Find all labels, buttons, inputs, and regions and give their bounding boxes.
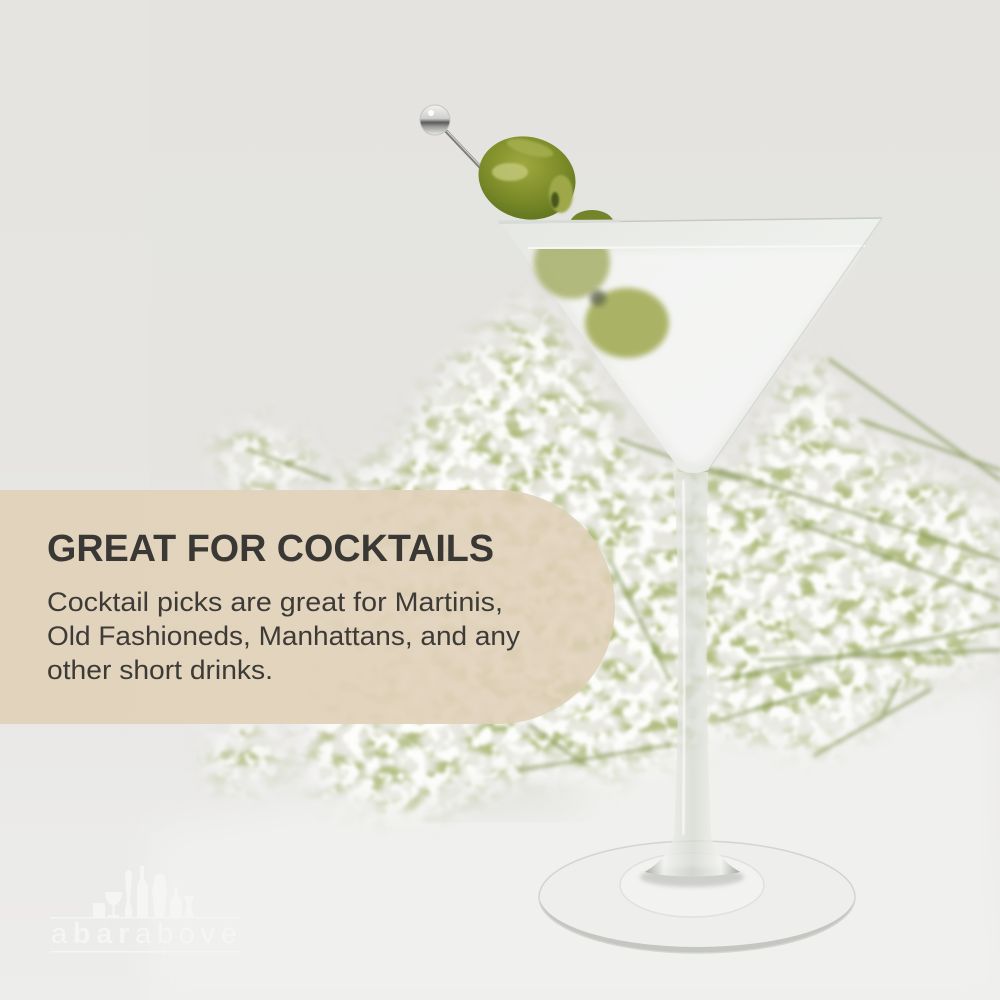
submerged olives xyxy=(530,249,673,362)
flower stems xyxy=(250,360,1000,770)
body text: Cocktail picks are great for Martinis, xyxy=(47,587,503,617)
heading: GREAT FOR COCKTAILS xyxy=(47,528,494,570)
back olive xyxy=(571,210,613,220)
text panel xyxy=(0,490,615,724)
body text: other short drinks. xyxy=(47,655,273,685)
rim over olive xyxy=(498,221,620,222)
logo bottles and glasses xyxy=(93,866,194,917)
rim highlight xyxy=(500,218,882,223)
glass base xyxy=(539,841,855,953)
martini glass xyxy=(500,218,882,953)
logo: a bar above xyxy=(50,866,240,952)
baby's breath flowers xyxy=(205,306,1000,823)
body text: Old Fashioneds, Manhattans, and any xyxy=(47,621,521,651)
glass bowl xyxy=(500,218,882,473)
logo wordmark: abarabove xyxy=(51,918,237,950)
olive on pick xyxy=(469,126,585,230)
glass stem xyxy=(645,472,740,876)
cocktail pick xyxy=(420,105,483,170)
body text xyxy=(47,587,521,685)
